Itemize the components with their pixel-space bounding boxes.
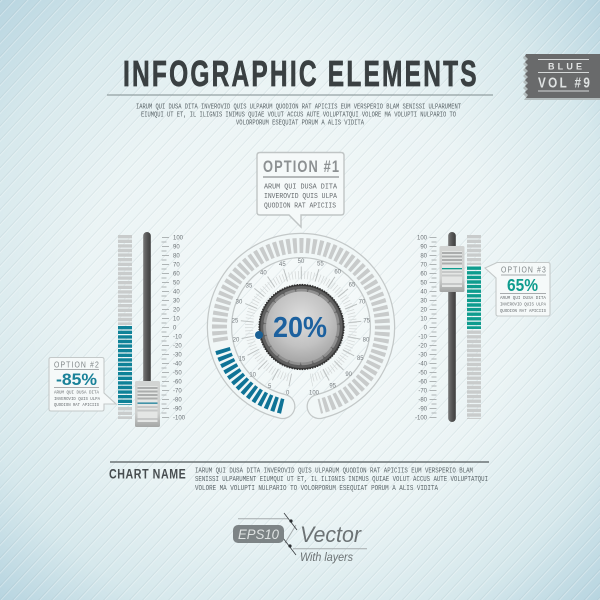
callout: option 2: INVEROVID QUIS ULPA bbox=[54, 396, 100, 402]
scale labels: -70 bbox=[418, 388, 428, 394]
dial labels: 65 bbox=[349, 282, 356, 288]
scale labels: -80 bbox=[418, 398, 428, 404]
callout: option 1 bbox=[257, 152, 344, 227]
scale labels: -10 bbox=[173, 334, 182, 340]
scale labels: 60 bbox=[420, 272, 428, 278]
dial labels: 70 bbox=[359, 299, 366, 305]
dial labels: 40 bbox=[260, 270, 267, 276]
dial labels: 55 bbox=[317, 262, 324, 268]
scale labels: 80 bbox=[420, 254, 428, 260]
scale labels: -60 bbox=[418, 380, 428, 386]
empty segments bbox=[219, 245, 382, 406]
dial labels: 50 bbox=[298, 259, 305, 265]
dial labels: 85 bbox=[357, 356, 364, 362]
eps10 vector logo: Vector bbox=[300, 522, 363, 547]
callout: option 2: -85% bbox=[56, 371, 97, 389]
tick marks bbox=[247, 273, 355, 380]
callout: option 3: ARUM QUI DUSA DITA bbox=[500, 295, 546, 301]
dial labels: 75 bbox=[363, 318, 371, 324]
scale labels: -40 bbox=[418, 362, 428, 368]
level bars bbox=[118, 235, 132, 419]
callout: option 3: INVEROVID QUIS ULPA bbox=[500, 302, 546, 308]
scale labels: -90 bbox=[418, 406, 428, 412]
badge: blue vol 9: VOL #9 bbox=[538, 74, 590, 91]
scale labels bbox=[173, 236, 186, 422]
scale labels: 50 bbox=[420, 280, 428, 286]
callout: option 3: OPTION #3 bbox=[501, 265, 546, 275]
scale labels: -20 bbox=[418, 344, 428, 350]
scale labels: 40 bbox=[173, 290, 180, 296]
scale labels: 10 bbox=[173, 316, 180, 322]
dial labels: 95 bbox=[329, 384, 337, 390]
scale labels: -100 bbox=[173, 416, 186, 422]
dial labels: 10 bbox=[249, 373, 257, 379]
scale labels: 30 bbox=[173, 298, 180, 304]
intro text: IARUM QUI DUSA DITA INVEROVID QUIS ULPARUM QUODION RAT APICIIS EUM VERSPERIO BLAM SENISSI ULPARUMENT bbox=[136, 104, 461, 112]
badge: blue vol 9: BLUE bbox=[548, 62, 582, 72]
scale labels: 40 bbox=[420, 290, 428, 296]
dial labels: 100 bbox=[309, 391, 320, 397]
scale labels: 20 bbox=[173, 308, 180, 314]
scale labels: -60 bbox=[173, 380, 182, 386]
intro text: VOLORPORUM ESEQUIAT PORUM A ALIS VIDITA bbox=[236, 120, 365, 128]
dial labels: 15 bbox=[239, 356, 246, 362]
chart name block: VOLORE MA VOLUPTI NULPARIO TO VOLORPORUM ESEQUIAT PORUM A ALIS VIDITA bbox=[195, 485, 439, 493]
scale labels: -80 bbox=[173, 398, 182, 404]
callout: option 1: QUODION RAT APICIIS bbox=[264, 202, 336, 210]
scale labels: 30 bbox=[420, 298, 428, 304]
intro text: EIUMQUI UT ET, IL ILIGNIS INIMUS QUIAE VOLUT ACCUS AUTE VOLUPTATQUI VOLORE MA VOLUPTI NULPARIO TO bbox=[141, 112, 456, 120]
scale labels: 10 bbox=[420, 316, 428, 322]
dial labels: 60 bbox=[334, 270, 342, 276]
callout: option 1: OPTION #1 bbox=[263, 159, 339, 176]
eps10 vector logo: EPS10 bbox=[238, 527, 279, 542]
scale labels: 100 bbox=[417, 236, 428, 242]
scale labels: -10 bbox=[418, 334, 428, 340]
filled segments bbox=[222, 347, 283, 406]
scale labels: -20 bbox=[173, 344, 182, 350]
callout: option 2 bbox=[49, 358, 116, 411]
chart name block: IARUM QUI DUSA DITA INVEROVID QUIS ULPARUM QUODION RAT APICIIS EUM VERSPERIO BLAM bbox=[195, 468, 473, 476]
dial labels: 30 bbox=[236, 300, 243, 306]
title: INFOGRAPHIC ELEMENTS bbox=[123, 53, 477, 94]
callout: option 2: ARUM QUI DUSA DITA bbox=[54, 390, 99, 396]
scale labels: 90 bbox=[173, 244, 180, 250]
callout: option 1: ARUM QUI DUSA DITA bbox=[264, 184, 337, 192]
callout: option 1: INVEROVID QUIS ULPA bbox=[264, 193, 337, 201]
dial labels: 90 bbox=[345, 372, 353, 378]
intro text bbox=[136, 104, 461, 128]
dial labels: 0 bbox=[286, 391, 290, 397]
dial labels: 45 bbox=[279, 262, 286, 268]
track bbox=[448, 232, 456, 422]
scale labels: 0 bbox=[173, 326, 177, 332]
eps10 vector logo: With layers bbox=[300, 552, 353, 564]
eps10 vector logo bbox=[233, 513, 367, 564]
scale labels: 60 bbox=[173, 272, 180, 278]
pointer dot bbox=[255, 331, 263, 339]
handle bbox=[440, 246, 464, 292]
scale labels: 90 bbox=[420, 244, 428, 250]
knob bbox=[259, 284, 344, 370]
callout: option 3: QUODION RAT APICIIS bbox=[500, 308, 546, 314]
callout: option 2: OPTION #2 bbox=[54, 360, 99, 370]
scale labels: -90 bbox=[173, 406, 182, 412]
chart name block: CHART NAME bbox=[109, 466, 186, 482]
scale labels: -50 bbox=[418, 370, 428, 376]
scale labels: -30 bbox=[173, 352, 182, 358]
scale labels: 20 bbox=[420, 308, 428, 314]
left slider bbox=[125, 232, 186, 427]
scale labels: 80 bbox=[173, 254, 180, 260]
callout: option 3 bbox=[485, 262, 550, 316]
dial gauge bbox=[219, 245, 382, 406]
dial labels: 5 bbox=[268, 384, 272, 390]
track bbox=[143, 232, 151, 424]
chart name block bbox=[109, 462, 489, 493]
scale labels: 70 bbox=[420, 262, 428, 268]
scale ticks bbox=[433, 237, 434, 418]
dial labels: 25 bbox=[232, 318, 239, 324]
dial labels: 35 bbox=[246, 283, 253, 289]
dial labels: 80 bbox=[363, 338, 370, 344]
scale labels: -50 bbox=[173, 370, 182, 376]
scale labels: -70 bbox=[173, 388, 182, 394]
callout: option 3: 65% bbox=[507, 275, 538, 295]
right slider bbox=[415, 232, 474, 422]
dial labels bbox=[232, 259, 371, 397]
handle bbox=[135, 381, 160, 427]
outer band bbox=[219, 245, 382, 406]
scale labels: 0 bbox=[424, 326, 428, 332]
scale labels: 100 bbox=[173, 236, 184, 242]
scale labels: -30 bbox=[418, 352, 428, 358]
dial labels: 20 bbox=[233, 338, 240, 344]
callout: option 2: QUODION RAT APICIIS bbox=[54, 402, 99, 408]
scale ticks bbox=[164, 237, 166, 418]
scale labels: -40 bbox=[173, 362, 182, 368]
level bars bbox=[467, 235, 481, 419]
scale labels bbox=[415, 236, 428, 422]
scale labels: 50 bbox=[173, 280, 180, 286]
value 20%: 20% bbox=[273, 312, 327, 344]
chart name block: SENISSI ULPARUMENT EIUMQUI UT ET, IL ILIGNIS INIMUS QUIAE VOLUT ACCUS AUTE VOLUPTATQUI bbox=[195, 476, 488, 484]
scale labels: -100 bbox=[415, 416, 428, 422]
scale labels: 70 bbox=[173, 262, 180, 268]
badge: blue vol 9 bbox=[523, 54, 600, 100]
